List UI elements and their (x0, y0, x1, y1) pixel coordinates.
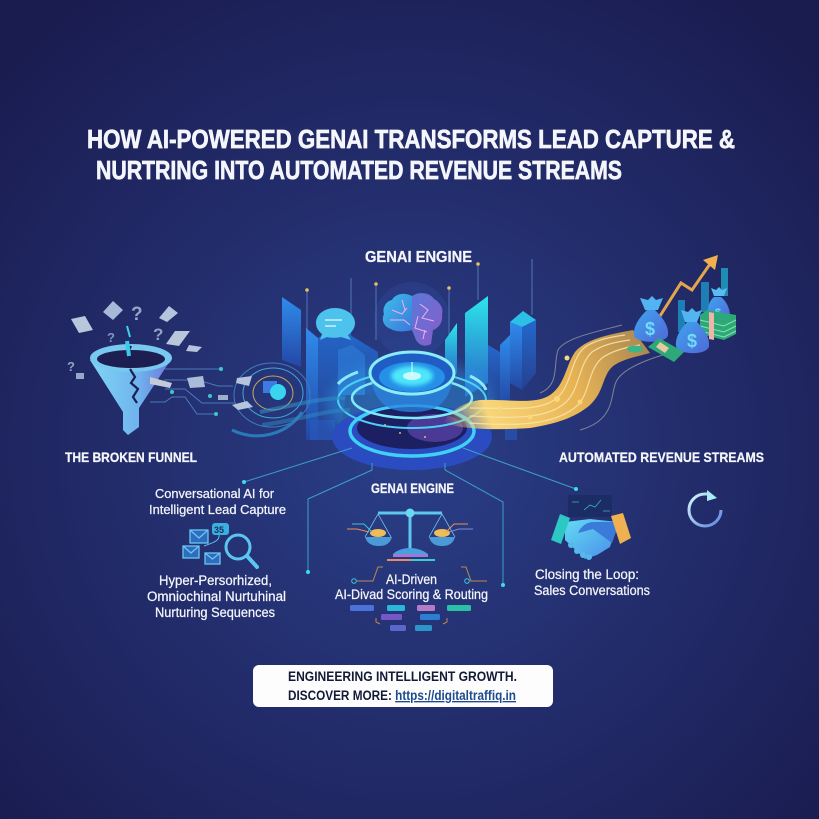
text: closing the loop: Closing the Loop: (535, 567, 639, 582)
cash bundle (627, 338, 684, 362)
text: AI-driven scoring: AI-Driven (386, 571, 437, 587)
icon: scattered papers and question marks: ? (131, 304, 143, 325)
icon: handshake with dashboard (551, 495, 631, 560)
icon: money bags and growth arrow (627, 255, 736, 362)
illustration: golden revenue stream (443, 325, 680, 430)
icon: refresh loop (689, 490, 721, 526)
call to action banner: ENGINEERING INTELLIGENT GROWTH. (288, 669, 517, 684)
icon: scattered papers and question marks: ? (107, 330, 115, 345)
text: closing the loop: Sales Conversations (534, 583, 650, 598)
text: conversational AI: Conversational AI for (155, 486, 275, 501)
connector lines (242, 448, 578, 587)
text: conversational AI: Intelligent Lead Capture (149, 502, 286, 517)
text: hyper-personalized nurturing: Hyper-Persorhized, (159, 572, 272, 588)
illustration: data flow circuit lines and hub (150, 363, 350, 436)
icon: envelopes and magnifier (183, 523, 257, 567)
icon: broken funnel (90, 326, 172, 435)
icon: chat bubble (316, 308, 355, 340)
icon: brain (374, 282, 450, 358)
text: conversational AI (149, 486, 286, 517)
heading: GenAI engine lower: GENAI ENGINE (371, 481, 454, 496)
icon: balance scale (347, 508, 473, 560)
section label: automated revenue streams: AUTOMATED REVENUE STREAMS (559, 449, 764, 465)
text: hyper-personalized nurturing (147, 572, 286, 620)
cash stack (700, 310, 736, 340)
icon: scattered papers and question marks: ? (67, 359, 75, 374)
text: AI-driven scoring (335, 571, 488, 602)
text: hyper-personalized nurturing: Nurturing Sequences (155, 605, 275, 620)
call to action banner (253, 665, 553, 707)
section label: the broken funnel: THE BROKEN FUNNEL (65, 449, 197, 465)
bag one: $ (645, 319, 655, 339)
text: hyper-personalized nurturing: Omniochinal Nurtuhinal (147, 589, 286, 604)
heading: GenAI engine: GENAI ENGINE (365, 249, 472, 266)
icon: envelopes and magnifier: 35 (214, 525, 224, 535)
icon: scattered papers and question marks (67, 301, 202, 379)
icon: scattered papers and question marks: ? (153, 325, 163, 344)
illustration: GenAI city skyline (282, 259, 536, 440)
illustration: holographic engine core (327, 352, 497, 470)
bag three: $ (715, 307, 721, 319)
title (87, 124, 735, 185)
diagram: routing nodes (350, 567, 487, 631)
text: closing the loop (534, 567, 650, 598)
call to action banner: DISCOVER MORE: https://digitaltraffiq.in (288, 688, 516, 703)
bag two: $ (687, 331, 697, 351)
title: NURTRING INTO AUTOMATED REVENUE STREAMS (96, 155, 622, 185)
text: AI-driven scoring: AI-Divad Scoring & Routing (335, 586, 488, 602)
